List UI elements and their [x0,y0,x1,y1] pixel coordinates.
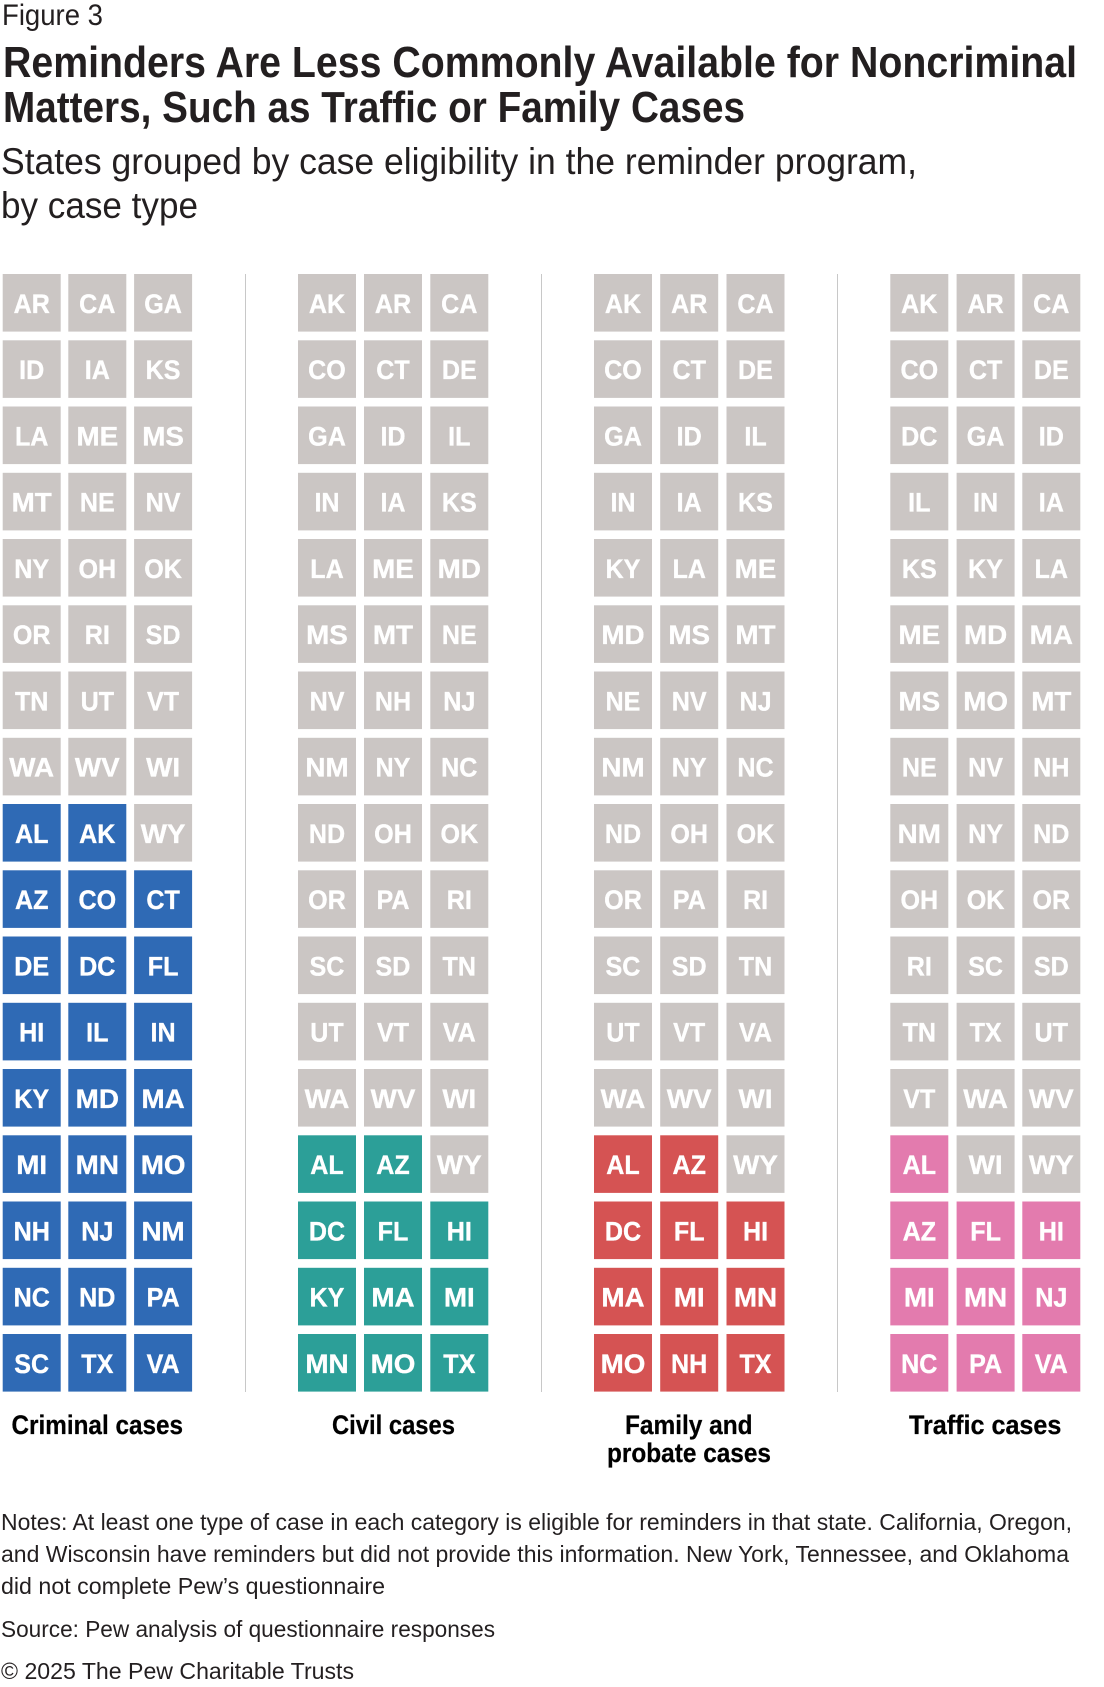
subtitle [1,141,917,226]
states without traffic case reminders: SC [968,950,1003,982]
states without civil case reminders: SD [376,950,410,982]
states with traffic case reminders: AL [903,1149,936,1180]
states without criminal case reminders: WA [9,752,54,783]
heading: civil cases: Civil cases [332,1410,455,1440]
heading: criminal cases: Criminal cases [12,1410,183,1440]
states without civil case reminders: MD [438,553,481,584]
states with civil case reminders: MA [371,1282,415,1313]
states without criminal case reminders: UT [81,685,114,717]
states without traffic case reminders: WY [1029,1149,1074,1180]
states without criminal case reminders: NY [14,553,49,584]
states with family and probate case reminders: MI [674,1282,705,1313]
states without traffic case reminders: OR [1032,884,1070,915]
states with civil case reminders: KY [310,1282,344,1313]
states without traffic case reminders: NE [902,752,937,783]
states without family and probate case reminders: PA [673,884,706,915]
states without criminal case reminders: WV [75,752,120,783]
states without traffic case reminders: OH [900,884,938,915]
states without family and probate case reminders: NY [672,752,707,783]
states without family and probate case reminders: CT [672,354,706,385]
states without civil case reminders: OH [374,818,412,849]
states without family and probate case reminders: GA [604,420,642,452]
states without civil case reminders: MS [306,619,348,650]
states without family and probate case reminders: NM [601,752,645,783]
states without civil case reminders: RI [447,884,472,915]
states without family and probate case reminders: MS [668,619,710,650]
states without civil case reminders [298,274,488,1193]
panel: criminal cases [3,274,192,1392]
states without civil case reminders: DE [442,354,477,385]
states with criminal case reminders: NJ [81,1215,113,1247]
states with family and probate case reminders: TX [739,1348,772,1379]
states without civil case reminders: NJ [443,685,475,717]
states without criminal case reminders: VT [147,685,179,717]
states without family and probate case reminders: WY [733,1149,778,1180]
states without traffic case reminders: OK [967,884,1005,915]
states without family and probate case reminders: SC [606,950,641,982]
states without traffic case reminders: MA [1030,619,1073,650]
states with criminal case reminders: MA [141,1083,185,1114]
states with criminal case reminders: FL [148,950,179,982]
states without civil case reminders: NV [310,685,345,717]
states without civil case reminders: IA [380,487,406,518]
title [3,39,1077,132]
states without family and probate case reminders: MT [735,619,776,650]
states with criminal case reminders: MN [76,1149,119,1180]
states without traffic case reminders: DE [1034,354,1069,385]
states without family and probate case reminders: TN [739,950,772,982]
states without traffic case reminders: IL [908,487,931,518]
states without civil case reminders: CO [308,354,346,385]
states without family and probate case reminders: NJ [739,685,772,717]
states with family and probate case reminders: FL [674,1215,705,1247]
notes: did not complete Pew’s questionnaire [1,1573,385,1599]
states without traffic case reminders: MD [964,619,1007,650]
states without civil case reminders: TN [443,950,476,982]
states without criminal case reminders: NV [146,487,181,518]
states without family and probate case reminders: KY [606,553,640,584]
states without criminal case reminders: SD [146,619,181,650]
states without family and probate case reminders: NC [737,752,774,783]
states without family and probate case reminders: OK [737,818,775,849]
states without traffic case reminders: IA [1039,487,1064,518]
states with civil case reminders: AL [310,1149,344,1180]
states without civil case reminders: VA [443,1017,476,1048]
states with family and probate case reminders: HI [743,1215,768,1247]
title: Matters, Such as Traffic or Family Cases [3,84,745,132]
states with family and probate case reminders: AL [606,1149,640,1180]
states without family and probate case reminders: WI [739,1083,772,1114]
states without family and probate case reminders: CA [737,288,774,319]
states with criminal case reminders: CT [146,884,180,915]
states without family and probate case reminders: NE [606,685,640,717]
states without civil case reminders: CA [441,288,478,319]
states without civil case reminders: IL [448,420,471,452]
states with traffic case reminders: PA [969,1348,1002,1379]
states without traffic case reminders: AK [901,288,938,319]
states without traffic case reminders: KS [902,553,937,584]
states without family and probate case reminders: WV [667,1083,712,1114]
states without traffic case reminders: AR [967,288,1004,319]
states without civil case reminders: ME [372,553,414,584]
states without family and probate case reminders: OR [604,884,642,915]
states with traffic case reminders: FL [970,1215,1001,1247]
states without traffic case reminders: UT [1035,1017,1068,1048]
states without criminal case reminders: TN [15,685,48,717]
states without traffic case reminders: NH [1033,752,1069,783]
states with family and probate case reminders: MO [601,1348,645,1379]
states without traffic case reminders: WV [1029,1083,1074,1114]
states with civil case reminders [298,1135,488,1392]
panel: traffic cases [890,274,1080,1392]
states without family and probate case reminders: ND [605,818,641,849]
states without traffic case reminders: ID [1039,420,1064,452]
states without family and probate case reminders: DE [738,354,773,385]
states without family and probate case reminders: ME [735,553,776,584]
states without civil case reminders: IN [314,487,340,518]
states with criminal case reminders: NH [14,1215,50,1247]
states with criminal case reminders: IL [86,1017,109,1048]
states with criminal case reminders: MO [141,1149,185,1180]
states without traffic case reminders: CO [900,354,938,385]
copyright: © 2025 The Pew Charitable Trusts [1,1658,354,1684]
states without traffic case reminders: GA [967,420,1005,452]
states without civil case reminders: OK [440,818,478,849]
states without traffic case reminders: MO [963,686,1008,716]
states without civil case reminders: PA [376,884,410,915]
states without family and probate case reminders: OH [670,818,708,849]
states without family and probate case reminders: IN [610,487,636,518]
states without traffic case reminders: ND [1033,818,1069,849]
states without civil case reminders: WA [305,1083,350,1114]
states without traffic case reminders: LA [1035,553,1068,584]
states with traffic case reminders [890,1135,1080,1392]
states with civil case reminders: HI [447,1215,472,1247]
states with criminal case reminders: ND [79,1282,115,1313]
states without criminal case reminders: CA [79,288,116,319]
states with criminal case reminders: AL [15,818,49,849]
states without criminal case reminders: OH [78,553,116,584]
states without family and probate case reminders: NV [672,685,707,717]
states without traffic case reminders [890,274,1080,1193]
states without civil case reminders: MT [373,619,413,650]
states with traffic case reminders: NJ [1035,1282,1067,1313]
states without traffic case reminders: CT [969,354,1002,385]
states with criminal case reminders: SC [14,1348,49,1379]
states without civil case reminders: VT [377,1017,409,1048]
states with criminal case reminders: PA [147,1282,180,1313]
states with criminal case reminders: AZ [15,884,49,915]
states without civil case reminders: CT [376,354,410,385]
states without traffic case reminders: NV [968,752,1004,783]
notes: Notes: At least one type of case in each category is eligible for reminders in that state. California, Oregon, [1,1509,1072,1535]
states with criminal case reminders: TX [81,1348,114,1379]
states without traffic case reminders: MT [1031,686,1072,716]
states with traffic case reminders: AZ [903,1215,936,1247]
states without criminal case reminders: AR [14,288,50,319]
source: Source: Pew analysis of questionnaire responses [1,1616,495,1642]
states without civil case reminders: NY [376,752,410,783]
states with civil case reminders: DC [309,1215,345,1247]
states with criminal case reminders: NM [141,1216,185,1246]
heading: family and probate cases [607,1410,771,1468]
states without criminal case reminders: WI [146,752,180,783]
states with family and probate case reminders: MA [601,1282,645,1313]
states without family and probate case reminders: AK [605,288,641,319]
states without civil case reminders: LA [310,553,344,584]
states without family and probate case reminders: VA [739,1017,772,1048]
states without family and probate case reminders: ID [677,420,702,452]
states with criminal case reminders: KY [14,1083,49,1114]
states with civil case reminders: AZ [376,1149,410,1180]
states with civil case reminders: MO [371,1348,415,1379]
states with family and probate case reminders [594,1135,784,1392]
states with civil case reminders: MI [444,1282,475,1313]
states with criminal case reminders: IN [151,1017,176,1048]
subtitle: States grouped by case eligibility in the reminder program, [1,141,917,182]
states without family and probate case reminders: RI [743,884,768,915]
states without traffic case reminders: IN [973,487,998,518]
states without civil case reminders: NM [305,752,349,783]
states without civil case reminders: OR [308,884,346,915]
states without traffic case reminders: NM [898,818,941,849]
states without civil case reminders: AR [375,288,411,319]
states without family and probate case reminders: IL [744,420,767,452]
states without criminal case reminders: GA [144,288,182,319]
states without criminal case reminders: MT [12,487,52,518]
states with traffic case reminders: NC [901,1348,938,1379]
states without family and probate case reminders: IA [677,487,702,518]
states without criminal case reminders: KS [146,354,181,385]
states without criminal case reminders: ID [19,354,44,385]
states with traffic case reminders: VA [1035,1348,1068,1379]
states without criminal case reminders: NE [80,487,115,518]
notes [1,1509,1072,1599]
states without criminal case reminders: RI [85,619,110,650]
states without family and probate case reminders: CO [604,354,642,385]
states without civil case reminders: WI [442,1083,476,1114]
states without criminal case reminders: OK [144,553,182,584]
states with family and probate case reminders: NH [671,1348,707,1379]
states with criminal case reminders [3,804,192,1392]
heading: family and probate cases: probate cases [607,1438,771,1468]
states with family and probate case reminders: DC [605,1215,641,1247]
states with criminal case reminders: MD [76,1083,119,1114]
states without traffic case reminders: TN [903,1017,936,1048]
states with criminal case reminders: HI [19,1017,44,1048]
states without criminal case reminders [3,274,192,862]
states with traffic case reminders: MI [904,1282,935,1313]
states without family and probate case reminders: SD [672,950,707,982]
states without civil case reminders: ND [309,818,345,849]
states with criminal case reminders: AK [79,818,116,849]
states without family and probate case reminders: MD [601,619,645,650]
states without family and probate case reminders: AR [671,288,707,319]
states without family and probate case reminders: KS [738,487,773,518]
states without criminal case reminders: WY [141,818,185,849]
states with criminal case reminders: VA [147,1348,180,1379]
panel: family and probate cases [594,274,784,1392]
states without traffic case reminders: WI [969,1149,1003,1180]
notes: and Wisconsin have reminders but did not provide this information. New York, Tennessee, and Oklahoma [1,1541,1070,1567]
states without traffic case reminders: ME [898,619,940,650]
states without traffic case reminders: RI [907,950,932,982]
states without criminal case reminders: ME [76,421,118,451]
states without family and probate case reminders: LA [672,553,706,584]
states without civil case reminders: SC [310,950,345,982]
states without civil case reminders: KS [442,487,477,518]
states without traffic case reminders: TX [970,1017,1002,1048]
states without family and probate case reminders: VT [673,1017,705,1048]
states without traffic case reminders: KY [968,553,1003,584]
subtitle: by case type [1,185,198,226]
heading: traffic cases: Traffic cases [909,1410,1061,1440]
states without civil case reminders: NC [441,752,478,783]
states with family and probate case reminders: MN [734,1282,777,1313]
states with criminal case reminders: DC [79,950,116,982]
states with civil case reminders: TX [443,1348,476,1379]
states with traffic case reminders: MN [964,1282,1007,1313]
states without civil case reminders: NH [375,685,411,717]
states without criminal case reminders: LA [15,420,49,452]
states with criminal case reminders: NC [14,1282,50,1313]
states with criminal case reminders: MI [16,1149,47,1180]
states without civil case reminders: WY [437,1149,482,1180]
states without traffic case reminders: MS [898,686,940,716]
heading: family and probate cases: Family and [625,1410,753,1440]
states with criminal case reminders: CO [78,884,116,915]
states without criminal case reminders: MS [142,421,184,451]
states without traffic case reminders: WA [963,1083,1008,1114]
states without criminal case reminders: IA [85,354,110,385]
states with criminal case reminders: DE [14,950,49,982]
states without family and probate case reminders: UT [606,1017,640,1048]
states without traffic case reminders: DC [901,420,938,452]
states without civil case reminders: AK [309,288,345,319]
states without family and probate case reminders [594,274,784,1193]
states with traffic case reminders: HI [1039,1215,1064,1247]
panel: civil cases [298,274,488,1392]
states without criminal case reminders: OR [13,619,51,650]
states without traffic case reminders: SD [1034,950,1069,982]
states with civil case reminders: MN [305,1348,349,1379]
states without civil case reminders: UT [310,1017,344,1048]
states with family and probate case reminders: AZ [672,1149,706,1180]
states without family and probate case reminders: WA [601,1083,646,1114]
states without traffic case reminders: NY [968,818,1003,849]
states without civil case reminders: ID [380,420,406,452]
states without traffic case reminders: VT [903,1083,935,1114]
states without civil case reminders: NE [442,619,477,650]
states without civil case reminders: GA [308,420,346,452]
states without civil case reminders: WV [371,1083,416,1114]
states without traffic case reminders: CA [1033,288,1070,319]
states with civil case reminders: FL [378,1215,408,1247]
